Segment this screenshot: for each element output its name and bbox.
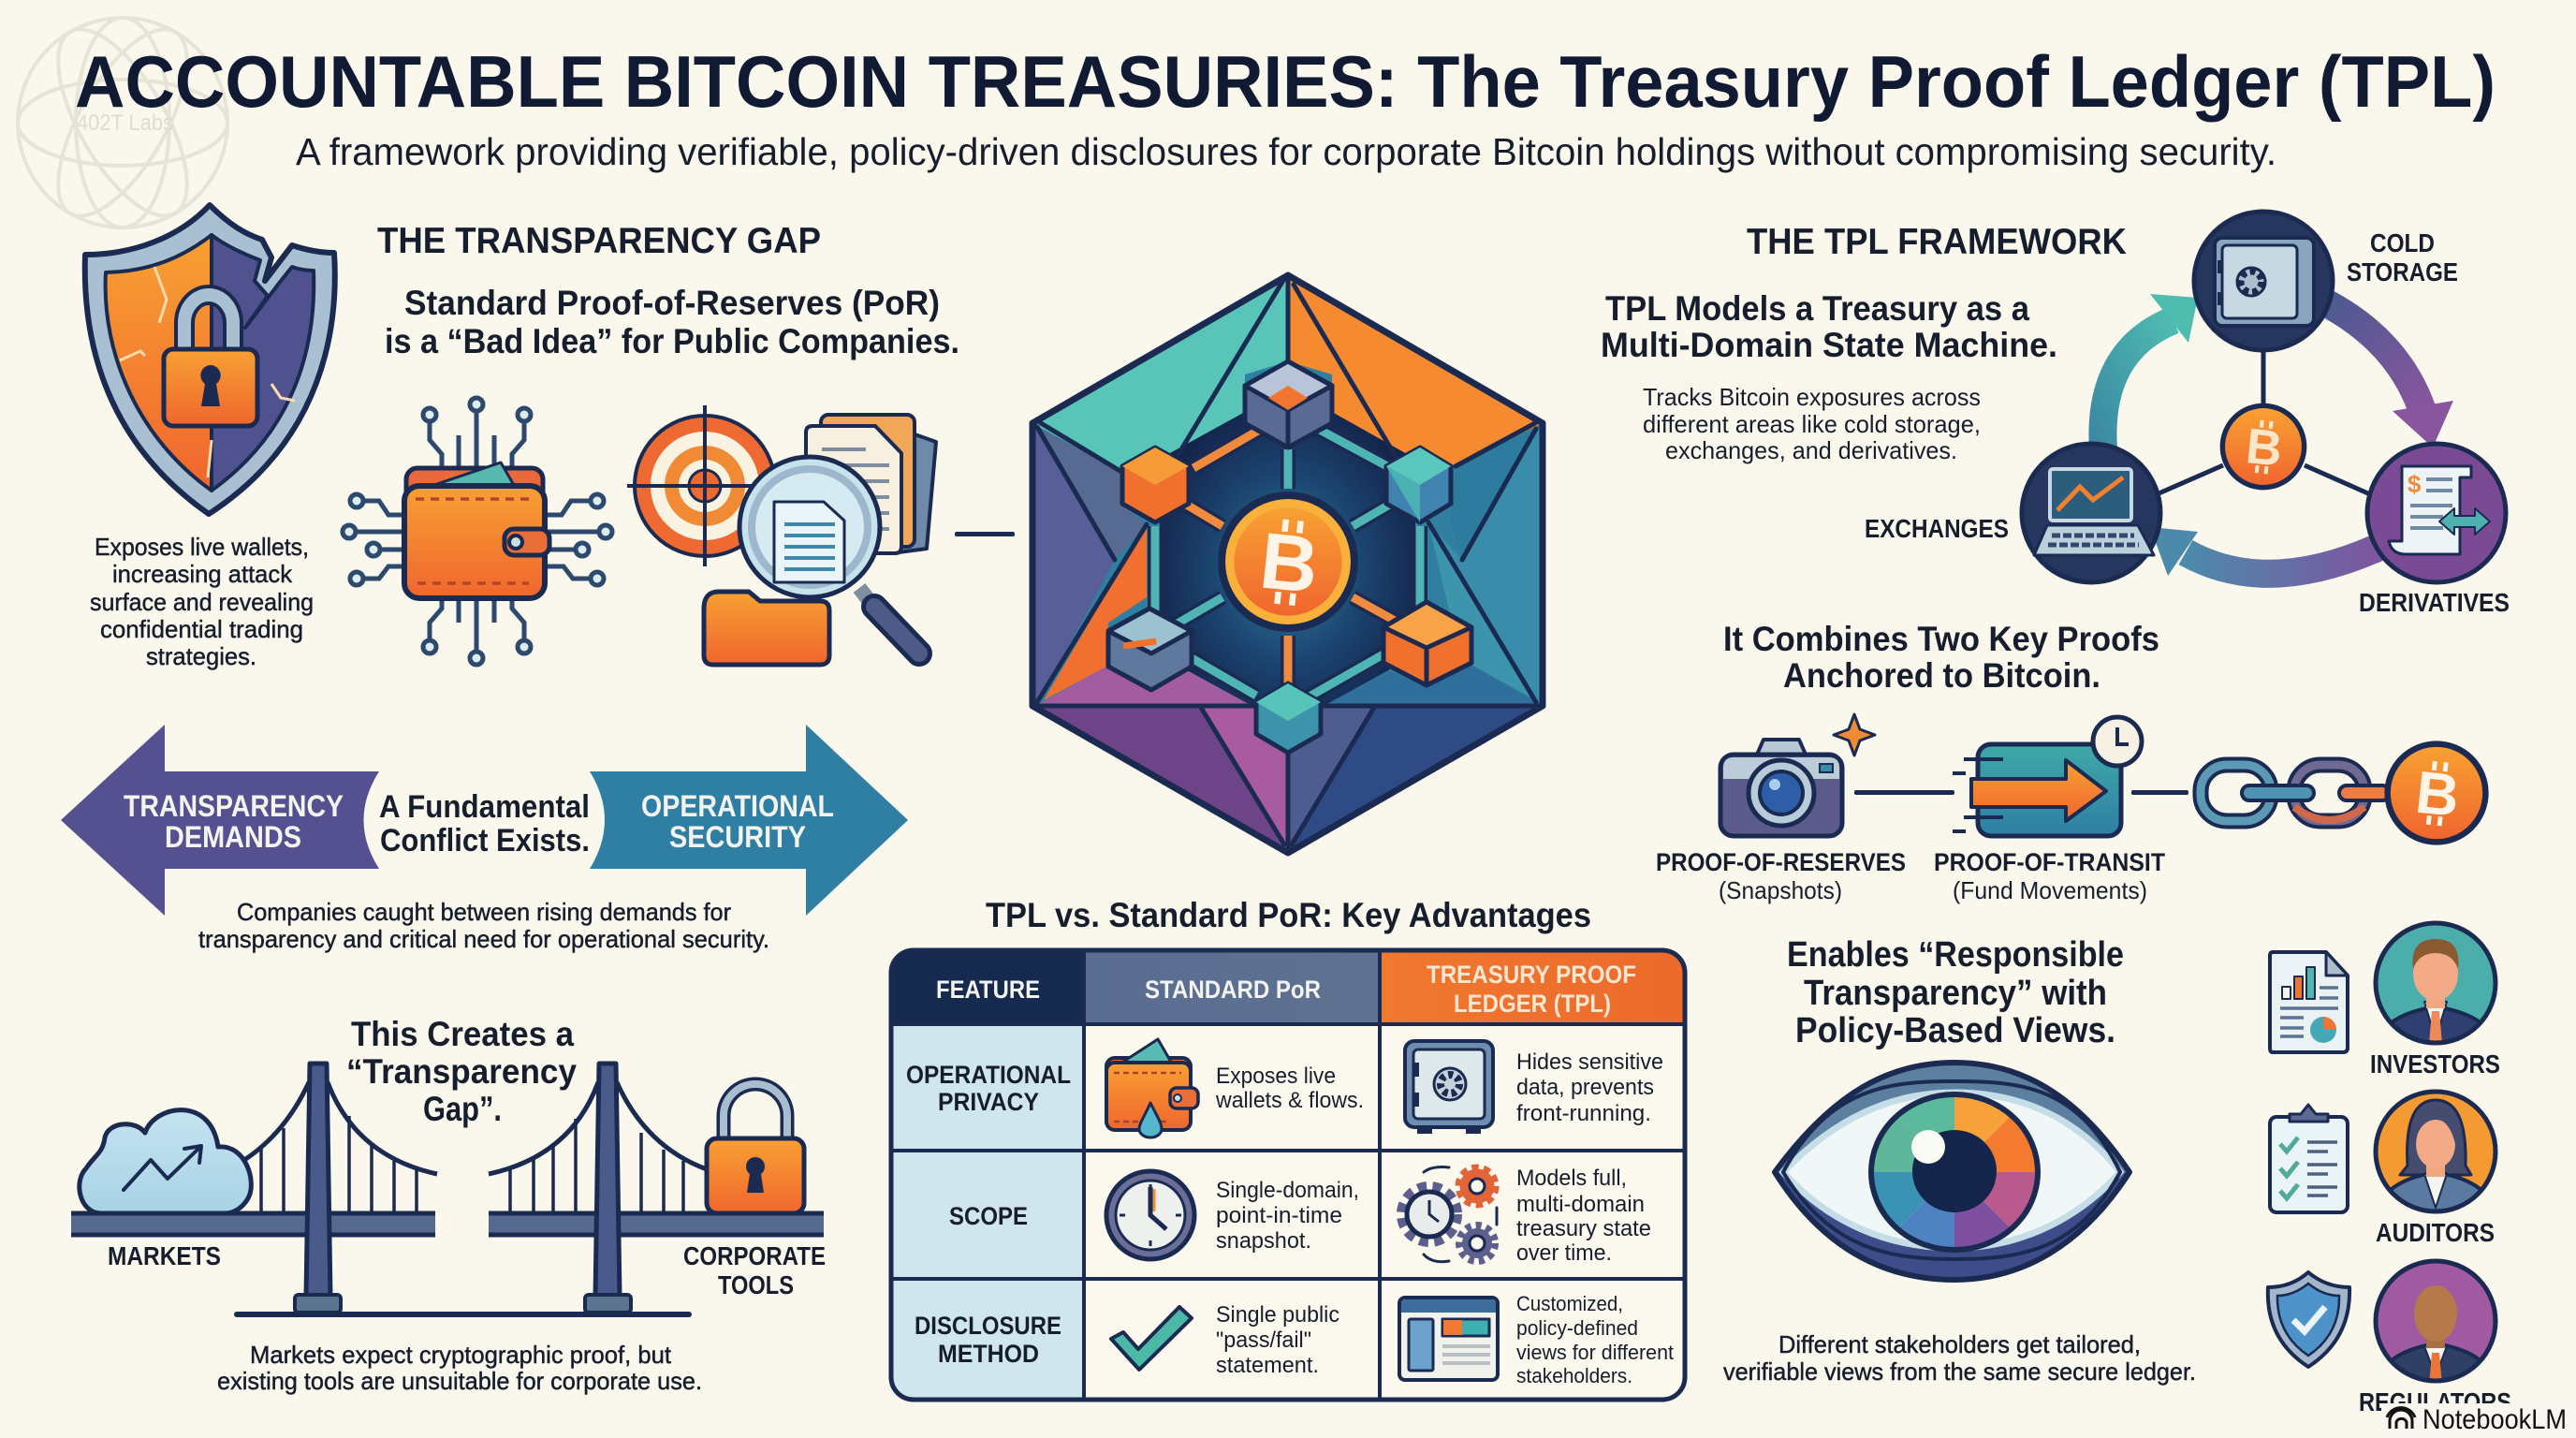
text: hides sensitive data: front-running. (1516, 1101, 1651, 1126)
heading: two key proofs: It Combines Two Key Proofs (1723, 620, 2159, 658)
icon: eye (1775, 1063, 2130, 1280)
icon: leaking wallet (1106, 1039, 1198, 1137)
node: derivatives contract (2367, 444, 2506, 582)
cube: top (1245, 361, 1332, 448)
label: auditors: AUDITORS (2376, 1218, 2495, 1247)
central hexagon with bitcoin network (1032, 275, 1543, 853)
facet: right blue (1451, 423, 1543, 560)
bridge cables and hangers (244, 1082, 707, 1213)
label: exchanges: EXCHANGES (1865, 514, 2009, 543)
table header: LEDGER (TPL) (1454, 990, 1611, 1018)
arrow: derivatives to exchanges (2150, 527, 2378, 576)
bitcoin coin (1221, 494, 1355, 629)
text: single domain snapshot (1216, 1178, 1359, 1254)
label: proof of transit: PROOF-OF-TRANSIT (1934, 848, 2165, 876)
icon: report document (2270, 952, 2348, 1052)
avatar: investor (2376, 923, 2496, 1044)
text: exposes live wallets: strategies. (146, 642, 256, 670)
node: bitcoin coin (2221, 404, 2305, 489)
text: different stakeholders: verifiable views from the same secure ledger. (1723, 1357, 2196, 1386)
text: single public statement: "pass/fail" (1216, 1328, 1311, 1353)
heading: a fundamental conflict exists: Conflict Exists. (380, 823, 590, 858)
text: exposes live wallets: confidential trading (100, 615, 303, 643)
text: exposes live wallets: increasing attack (112, 560, 293, 588)
text: hides sensitive data: data, prevents (1516, 1075, 1654, 1100)
heading: standard proof of reserves: Standard Proof-of-Reserves (PoR) (404, 284, 940, 322)
heading: standard proof of reserves: is a “Bad Idea” for Public Companies. (385, 322, 959, 360)
row label: disclosure method (915, 1312, 1061, 1368)
icon: transit card with arrow and clock (1953, 717, 2142, 836)
cube: lower right orange (1383, 602, 1471, 685)
text: single public statement: Single public (1216, 1302, 1339, 1328)
label: cold storage: STORAGE (2347, 257, 2458, 286)
icon: dashboard window (1399, 1298, 1498, 1380)
row label: disclosure method: METHOD (938, 1340, 1039, 1368)
text: exposes live wallets (90, 533, 314, 670)
left deck (71, 1213, 435, 1235)
icon: target with documents and magnifying glass (627, 405, 936, 665)
heading: this creates a transparency gap (346, 1015, 577, 1128)
facet: teal (1032, 275, 1288, 473)
text: single domain snapshot: snapshot. (1216, 1228, 1311, 1254)
icon: padlock (707, 1084, 804, 1213)
arrow: transparency demands (61, 725, 379, 916)
text: models full state: over time. (1516, 1240, 1612, 1266)
text: exposes live wallets: Exposes live wallets, (95, 533, 309, 561)
label: cold storage: COLD (2370, 228, 2435, 257)
text: markets expect cryptographic proof (217, 1341, 702, 1395)
heading: this creates a transparency gap: “Transparency (346, 1052, 577, 1091)
ground line (234, 1312, 692, 1317)
text: models full state: treasury state (1516, 1216, 1651, 1241)
label: regulators: REGULATORS (2359, 1387, 2511, 1416)
text: customized policy views (1516, 1292, 1674, 1387)
icon: chain anchored to bitcoin: B (2412, 758, 2463, 829)
label: corporate tools: TOOLS (718, 1270, 794, 1299)
icon: camera (1720, 740, 1842, 836)
facet: upper left slate (1037, 427, 1147, 560)
text: models full state: Models full, (1516, 1166, 1627, 1191)
node: bitcoin coin: B (2244, 418, 2285, 477)
heading: a fundamental conflict exists: A Fundamental (379, 789, 590, 825)
node: derivatives contract: $ (2408, 470, 2422, 498)
text: exposes live wallets and flows: Exposes live (1216, 1064, 1336, 1089)
table header: FEATURE (936, 976, 1040, 1004)
heading: multi-domain state machine: Multi-Domain State Machine. (1601, 326, 2057, 364)
text: tracks bitcoin exposures: exchanges, and derivatives. (1665, 436, 1957, 464)
facet: left indigo (1032, 423, 1115, 706)
heading: a fundamental conflict exists (379, 789, 590, 858)
text: different stakeholders: Different stakeholders get tailored, (1778, 1330, 2141, 1358)
text: markets expect cryptographic proof: Markets expect cryptographic proof, but (250, 1341, 672, 1369)
icon: cloud with growth arrow (80, 1110, 251, 1213)
text: markets expect cryptographic proof: existing tools are unsuitable for corporate use. (217, 1367, 702, 1395)
heading: responsible transparency (1787, 935, 2124, 1050)
icon: check mark (1111, 1307, 1192, 1370)
watermark: 402T Labs (18, 10, 227, 235)
cube: lower left glass (1108, 609, 1192, 690)
title: ACCOUNTABLE BITCOIN TREASURIES: The Treasury Proof Ledger (TPL) (75, 40, 2496, 123)
label: proof of reserves: (Snapshots) (1719, 876, 1842, 904)
heading: multi-domain state machine (1601, 289, 2057, 364)
cube: bottom teal (1256, 683, 1321, 753)
text: single domain snapshot: Single-domain, (1216, 1178, 1359, 1203)
label: corporate tools (683, 1241, 826, 1299)
table header (936, 961, 1636, 1018)
node: cold storage safe (2194, 212, 2333, 350)
heading: responsible transparency: Transparency” with (1804, 974, 2107, 1013)
text: companies caught: transparency and critical need for operational security. (198, 925, 769, 953)
text: companies caught: Companies caught between rising demands for (237, 898, 731, 926)
state machine cycle diagram (2022, 212, 2506, 582)
text: companies caught (198, 898, 769, 953)
heading: two key proofs (1723, 620, 2159, 695)
icon: chain anchored to bitcoin (2201, 742, 2487, 844)
label: proof of reserves (1656, 848, 1906, 904)
table header: STANDARD PoR (1145, 976, 1321, 1004)
label: markets: MARKETS (108, 1241, 221, 1270)
core (1160, 412, 1415, 726)
facet: lower blue (1288, 706, 1375, 853)
label: proof of transit: (Fund Movements) (1953, 876, 2147, 904)
row label: operational privacy (906, 1061, 1071, 1116)
heading: the transparency gap: THE TRANSPARENCY GAP (377, 221, 821, 261)
facet: lower purple (1032, 706, 1288, 853)
right deck (489, 1213, 824, 1235)
facet: orange (1288, 275, 1543, 466)
network bars (1147, 422, 1422, 697)
facet: purple band (1039, 665, 1256, 706)
text: exposes live wallets: surface and revealing (90, 588, 314, 616)
right tower (585, 1064, 631, 1313)
text: exposes live wallets and flows: wallets & flows. (1215, 1088, 1364, 1113)
heading: responsible transparency: Policy-Based Views. (1795, 1011, 2115, 1050)
row label: operational privacy: OPERATIONAL (906, 1061, 1071, 1089)
arrow: cold storage to derivatives (2323, 301, 2453, 448)
text: different stakeholders (1723, 1330, 2196, 1386)
label: derivatives: DERIVATIVES (2359, 588, 2510, 617)
icon: cracked shield with lock (85, 205, 335, 514)
label: cold storage (2347, 228, 2458, 286)
arrow: operational security: OPERATIONAL (641, 789, 834, 823)
text: tracks bitcoin exposures: Tracks Bitcoin exposures across (1643, 383, 1981, 411)
text: single public statement (1216, 1302, 1339, 1378)
spoke lines (2157, 350, 2370, 494)
label: proof of transit (1934, 848, 2165, 904)
text: hides sensitive data: Hides sensitive (1516, 1049, 1663, 1075)
connector: transit to chain (2131, 790, 2188, 795)
comparison table (891, 950, 1685, 1400)
text: customized policy views: policy-defined (1516, 1316, 1638, 1340)
connector: proof of reserves to transit (1854, 790, 1954, 795)
text: models full state (1516, 1166, 1651, 1266)
icon: gears (1403, 1167, 1497, 1262)
heading: standard proof of reserves (385, 284, 959, 360)
avatar: regulator (2376, 1261, 2496, 1386)
text: exposes live wallets and flows (1215, 1064, 1364, 1113)
row label: operational privacy: PRIVACY (938, 1088, 1039, 1116)
illustration: broken bridge (71, 1064, 824, 1317)
arrow: exchanges to cold storage (2102, 294, 2198, 449)
subtitle: A framework providing verifiable, policy-driven disclosures for corporate Bitcoin holdings without compromising security. (296, 130, 2276, 173)
cube: right teal (1386, 448, 1451, 522)
watermark: 402T Labs: 402T Labs (77, 110, 173, 136)
facet: left orange (1044, 524, 1147, 700)
text: customized policy views: stakeholders. (1516, 1364, 1632, 1387)
text: single public statement: statement. (1216, 1353, 1319, 1378)
node: exchanges laptop (2022, 444, 2160, 582)
heading: table title: TPL vs. Standard PoR: Key Advantages (986, 896, 1591, 934)
row label: scope: SCOPE (949, 1202, 1028, 1230)
arrow: transparency demands: TRANSPARENCY (124, 789, 344, 823)
heading: this creates a transparency gap: This Creates a (351, 1015, 574, 1053)
icon: safe (1405, 1041, 1493, 1131)
label: corporate tools: CORPORATE (683, 1241, 826, 1270)
text: models full state: multi-domain (1516, 1192, 1645, 1217)
icon: clipboard checklist (2270, 1105, 2348, 1212)
connector dash (955, 532, 1015, 536)
avatar: auditor (2376, 1092, 2496, 1212)
icon: sparkle (1834, 714, 1875, 756)
cube: left orange (1122, 448, 1189, 522)
text: customized policy views: Customized, (1516, 1292, 1623, 1315)
left tower (295, 1064, 341, 1313)
table header: TREASURY PROOF (1427, 961, 1636, 989)
icon: wallet with circuit traces (343, 398, 612, 665)
bitcoin coin: B (1256, 516, 1323, 610)
text: hides sensitive data (1516, 1049, 1663, 1126)
text: tracks bitcoin exposures (1643, 383, 1981, 464)
facet: right teal (1428, 423, 1543, 706)
heading: multi-domain state machine: TPL Models a Treasury as a (1605, 289, 2029, 328)
heading: two key proofs: Anchored to Bitcoin. (1783, 656, 2100, 695)
text: tracks bitcoin exposures: different areas like cold storage, (1643, 410, 1981, 438)
arrow: operational security: SECURITY (669, 820, 806, 854)
icon: verified shield (2268, 1272, 2349, 1367)
heading: the TPL framework: THE TPL FRAMEWORK (1747, 222, 2127, 262)
arrow: transparency demands: DEMANDS (165, 820, 301, 854)
text: customized policy views: views for different (1516, 1341, 1674, 1364)
arrow: operational security (590, 725, 908, 916)
icon: clock (1106, 1171, 1194, 1259)
label: proof of reserves: PROOF-OF-RESERVES (1656, 848, 1906, 876)
row label: disclosure method: DISCLOSURE (915, 1312, 1061, 1340)
heading: responsible transparency: Enables “Responsible (1787, 935, 2124, 975)
text: single domain snapshot: point-in-time (1216, 1203, 1342, 1228)
heading: this creates a transparency gap: Gap”. (423, 1090, 502, 1128)
label: investors: INVESTORS (2370, 1049, 2500, 1078)
